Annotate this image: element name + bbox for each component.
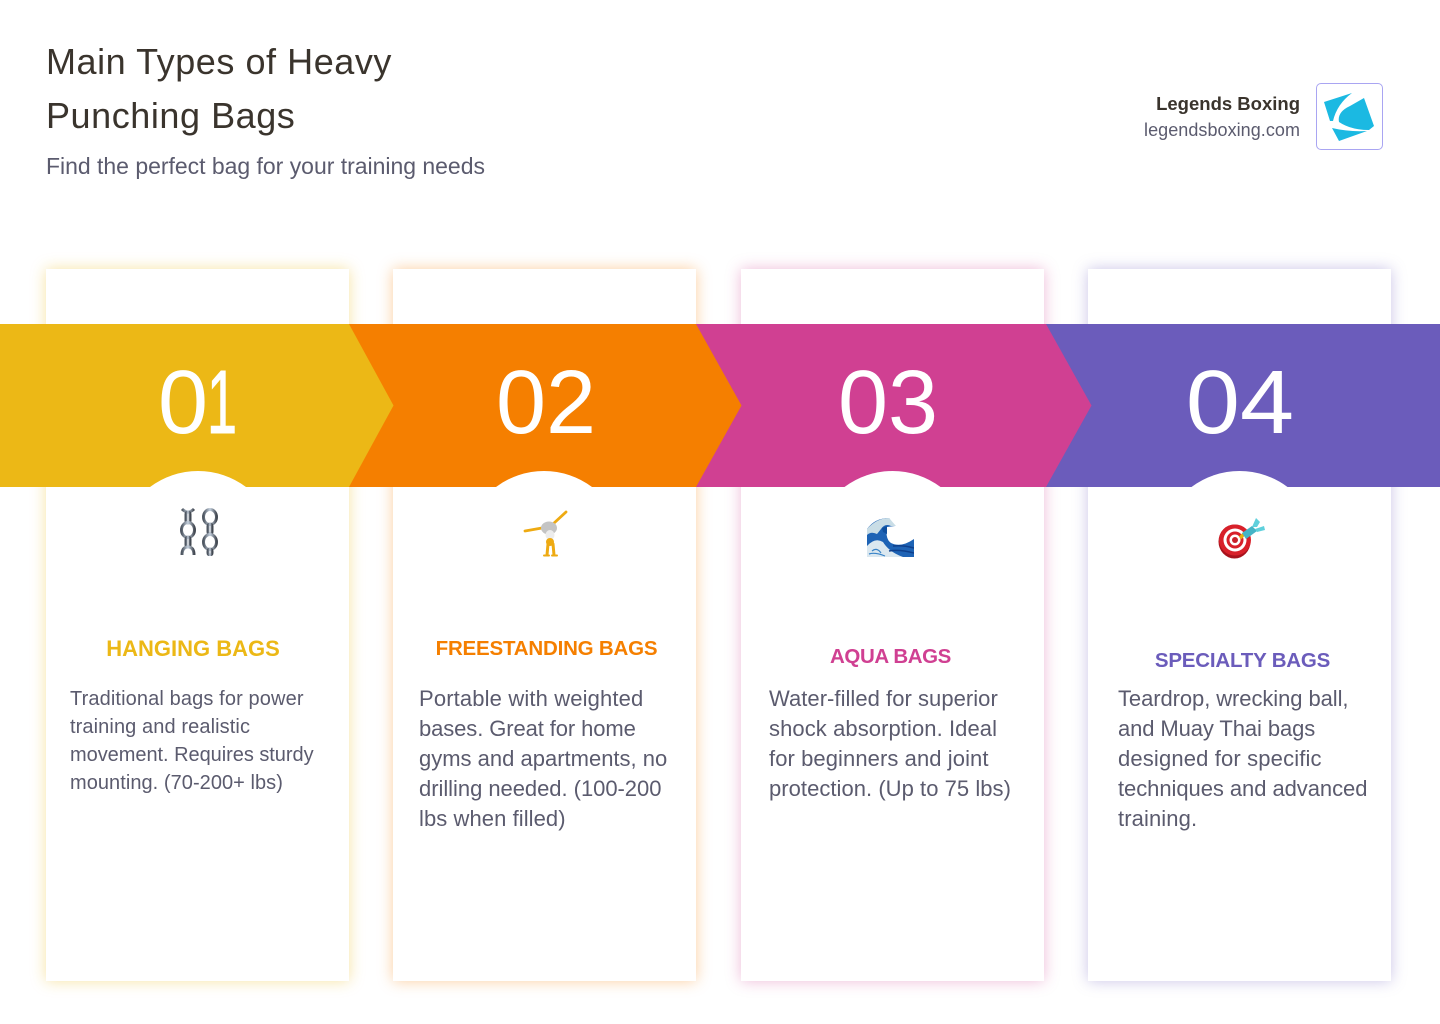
arrow: step 2 bbox=[349, 324, 742, 487]
panel: card 1 bbox=[46, 269, 349, 981]
title: Main Types of Heavy bbox=[46, 41, 392, 82]
text: freestanding bags: gyms and apartments, no bbox=[419, 746, 667, 771]
text: specialty bags bbox=[1118, 686, 1367, 831]
number 04: 04 bbox=[1186, 353, 1294, 453]
arrow: step 3 bbox=[696, 324, 1092, 487]
brand name: Legends Boxing bbox=[1156, 93, 1300, 114]
text: freestanding bags bbox=[419, 686, 667, 831]
arrow: step 1 bbox=[0, 324, 394, 487]
number 02: 02 bbox=[496, 353, 596, 453]
notch: step 4 bbox=[1192, 471, 1288, 487]
notch: step 3 bbox=[844, 471, 940, 487]
icon: target with dart bbox=[1218, 518, 1265, 558]
panel: card 3 bbox=[741, 269, 1044, 981]
arrow: step 4 bbox=[1046, 324, 1440, 487]
title bbox=[46, 41, 392, 136]
text: specialty bags: Teardrop, wrecking ball, bbox=[1118, 686, 1348, 711]
icon: chains bbox=[180, 508, 218, 556]
text: hanging bags: mounting. (70-200+ lbs) bbox=[70, 772, 283, 794]
text: hanging bags bbox=[70, 688, 314, 794]
text: specialty bags: techniques and advanced bbox=[1118, 776, 1367, 801]
text: aqua bags: for beginners and joint bbox=[769, 746, 989, 771]
title: Punching Bags bbox=[46, 95, 295, 136]
text: hanging bags: movement. Requires sturdy bbox=[70, 744, 314, 766]
text: aqua bags: shock absorption. Ideal bbox=[769, 716, 997, 741]
subtitle: Find the perfect bag for your training needs bbox=[46, 153, 485, 179]
text: specialty bags: and Muay Thai bags bbox=[1118, 716, 1315, 741]
number 01: 1 bbox=[207, 353, 237, 453]
notch: step 2 bbox=[496, 471, 592, 487]
text: freestanding bags: Portable with weighted bbox=[419, 686, 643, 711]
icon: brand logo bbox=[1316, 83, 1383, 150]
icon: water wave bbox=[867, 518, 914, 557]
text: hanging bags: Traditional bags for power bbox=[70, 688, 304, 710]
text: specialty bags: designed for specific bbox=[1118, 746, 1322, 771]
number 01 bbox=[158, 353, 237, 453]
heading: freestanding bags: FREESTANDING BAGS bbox=[436, 637, 657, 660]
text: freestanding bags: lbs when filled) bbox=[419, 806, 566, 831]
number 01: 0 bbox=[158, 353, 208, 453]
text: hanging bags: training and realistic bbox=[70, 716, 250, 738]
number 03: 03 bbox=[838, 353, 938, 453]
brand website: legendsboxing.com bbox=[1144, 120, 1300, 140]
notch: step 1 bbox=[150, 471, 246, 487]
panel: card 2 bbox=[393, 269, 696, 981]
text: specialty bags: training. bbox=[1118, 806, 1197, 831]
heading: aqua bags: AQUA BAGS bbox=[830, 645, 951, 668]
icon: person cartwheeling bbox=[524, 510, 568, 556]
text: freestanding bags: bases. Great for home bbox=[419, 716, 636, 741]
text: aqua bags: protection. (Up to 75 lbs) bbox=[769, 776, 1011, 801]
text: aqua bags: Water-filled for superior bbox=[769, 686, 998, 711]
panel: card 4 bbox=[1088, 269, 1391, 981]
heading: specialty bags: SPECIALTY BAGS bbox=[1155, 649, 1330, 672]
heading: hanging bags: HANGING BAGS bbox=[106, 636, 280, 661]
text: aqua bags bbox=[769, 686, 1011, 801]
text: freestanding bags: drilling needed. (100-200 bbox=[419, 776, 661, 801]
arrow band bbox=[0, 324, 1440, 487]
